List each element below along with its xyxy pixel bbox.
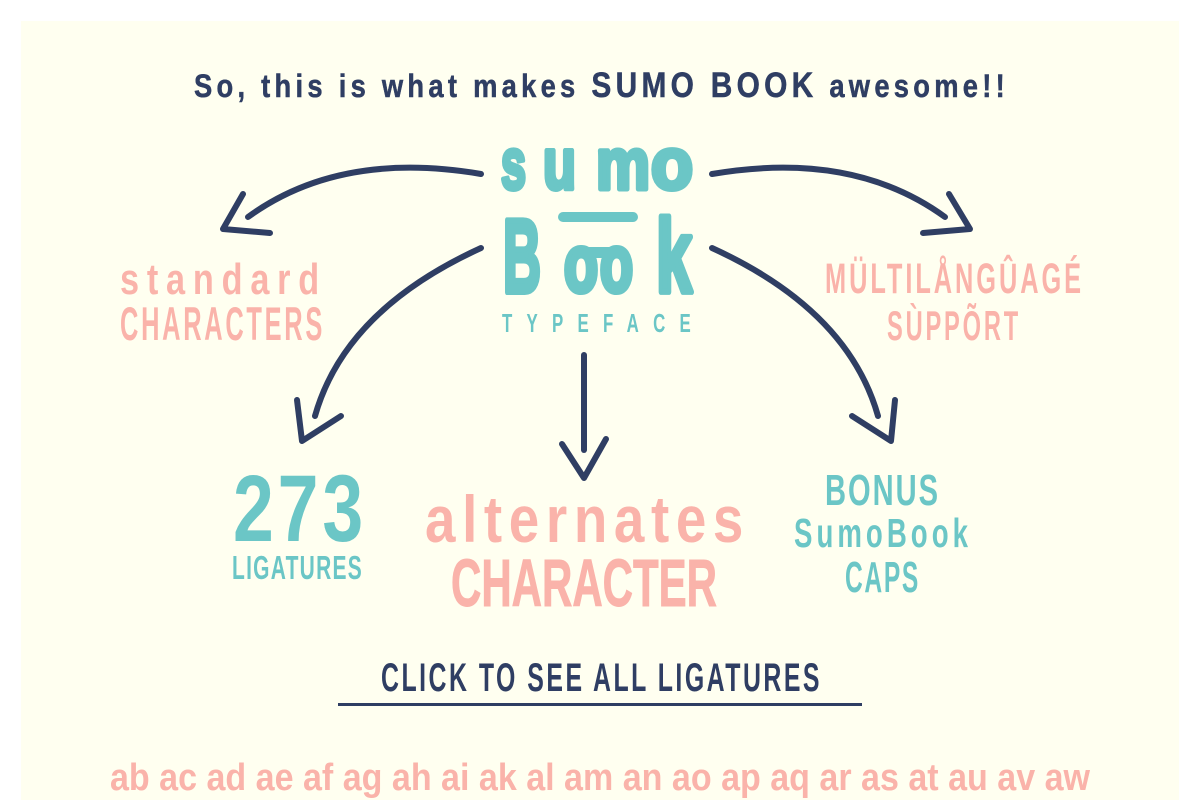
arrow: to standard characters (223, 168, 481, 233)
label: standard characters: CHARACTERS (120, 297, 325, 350)
logo word: sumo: s (501, 125, 526, 205)
logo bar over the double o (558, 212, 638, 222)
label: bonus SumoBook caps: SumoBook (794, 510, 972, 556)
logo word: sumo: u (543, 125, 576, 205)
call to action: CLICK TO SEE ALL LIGATURES (381, 656, 822, 700)
label: standard characters: standard (120, 255, 327, 304)
logo word: Book: o (564, 219, 598, 308)
logo word: sumo: m (596, 125, 650, 205)
arrow: to ligatures (297, 248, 481, 441)
label: multilanguage support: SÙPPÕRT (887, 301, 1021, 349)
logo word: sumo: o (651, 125, 693, 205)
logo word: Book (503, 199, 692, 315)
logo word: Book: B (503, 199, 541, 315)
arrow: to alternates (562, 355, 606, 478)
label: bonus SumoBook caps: CAPS (845, 553, 920, 602)
label: multilanguage support (825, 254, 1084, 349)
label: 273 ligatures (232, 456, 367, 586)
label: 273 ligatures: LIGATURES (232, 549, 363, 586)
ligature sample row: ab ac ad ae af ag ah ai ak al am an ao ap aq ar as at au av aw (110, 757, 1090, 799)
label: bonus SumoBook caps: BONUS (825, 466, 940, 515)
label: alternates character (425, 482, 750, 621)
arrow: to multilanguage support (712, 168, 970, 233)
logo link joining the double o (574, 247, 626, 258)
label: bonus SumoBook caps (794, 466, 972, 602)
label: standard characters (120, 255, 327, 350)
title: So, this is what makes SUMO BOOK awesome!! (194, 66, 1009, 105)
arrow: to bonus caps (712, 248, 895, 441)
label: alternates character: alternates (425, 482, 750, 556)
label: alternates character: CHARACTER (451, 546, 717, 621)
label: 273 ligatures: 273 (233, 456, 367, 562)
call to action (338, 656, 862, 706)
logo: Sumo Book typeface (501, 125, 705, 338)
logo word: Book: k (656, 199, 692, 315)
logo caption: TYPEFACE: TYPEFACE (502, 308, 705, 338)
logo word: Book: o (600, 219, 633, 308)
logo word: sumo (501, 125, 693, 205)
